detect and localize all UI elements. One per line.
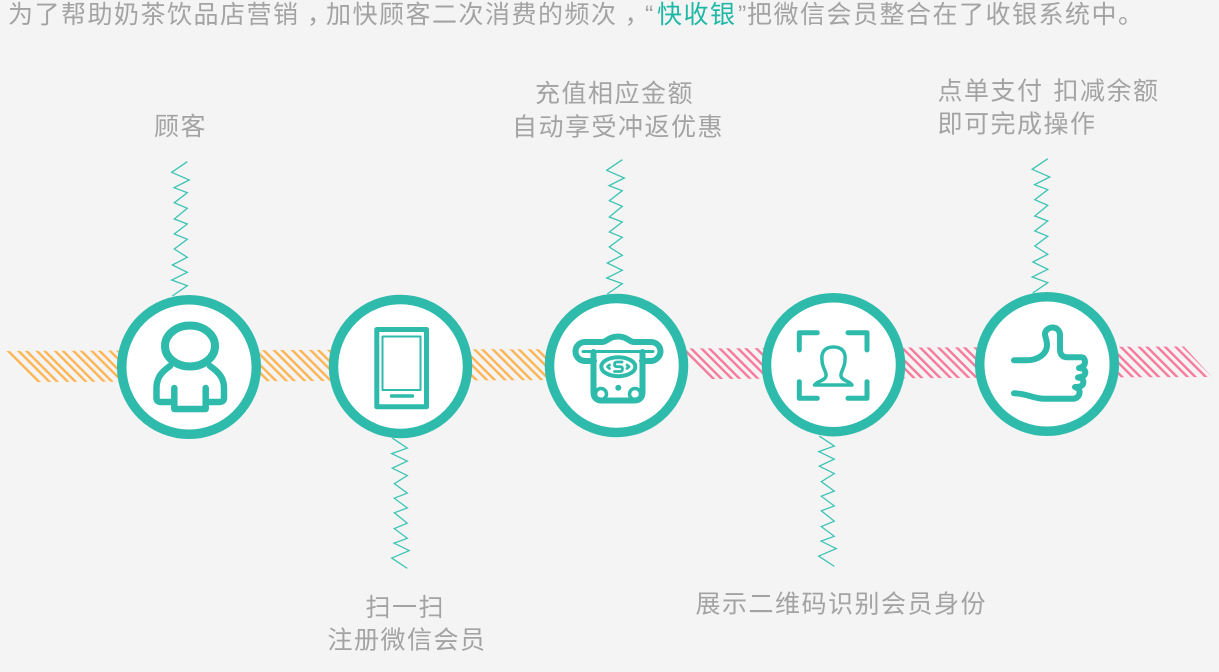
label: scan to register <box>328 594 487 654</box>
label: recharge: 自动享受冲返优惠 <box>512 114 724 142</box>
zigzag connector 5 <box>1032 159 1050 293</box>
label: pay and deduct: 即可完成操作 <box>938 110 1097 138</box>
step 4: face scan icon <box>766 298 900 432</box>
step 1: customer icon <box>122 300 256 434</box>
zigzag connector 4 <box>819 436 836 566</box>
label: show member QR code: 展示二维码识别会员身份 <box>696 590 987 618</box>
title text: ， <box>307 1 334 29</box>
orange striped band <box>6 349 591 382</box>
label: recharge: 充值相应金额 <box>535 80 694 108</box>
title text: ” <box>738 1 748 29</box>
label: pay and deduct <box>938 78 1160 138</box>
label: scan to register: 注册微信会员 <box>328 626 487 654</box>
zigzag connector 3 <box>607 160 624 294</box>
zigzag connector 1 <box>172 162 189 296</box>
zigzag connector 2 <box>392 438 409 568</box>
label: pay and deduct: 点单支付 <box>938 78 1044 106</box>
title text: 快收银 <box>657 1 737 29</box>
title text: 把微信会员整合在了收银系统中。 <box>747 1 1145 29</box>
title text: 加快顾客二次消费的频次 <box>326 1 618 29</box>
title text: “ <box>645 1 655 29</box>
label: customer: 顾客 <box>154 113 207 141</box>
step 5: thumbs up icon <box>980 297 1114 431</box>
title text: ， <box>624 1 651 29</box>
label: scan to register: 扫一扫 <box>366 594 445 622</box>
step 3: cash recharge icon <box>550 298 684 432</box>
title text: 为了帮助奶茶饮品店营销 <box>8 1 300 29</box>
label: recharge <box>512 80 724 142</box>
label: pay and deduct: 扣减余额 <box>1054 78 1160 106</box>
pink striped band <box>680 346 1212 379</box>
step 2: phone icon <box>334 300 468 434</box>
